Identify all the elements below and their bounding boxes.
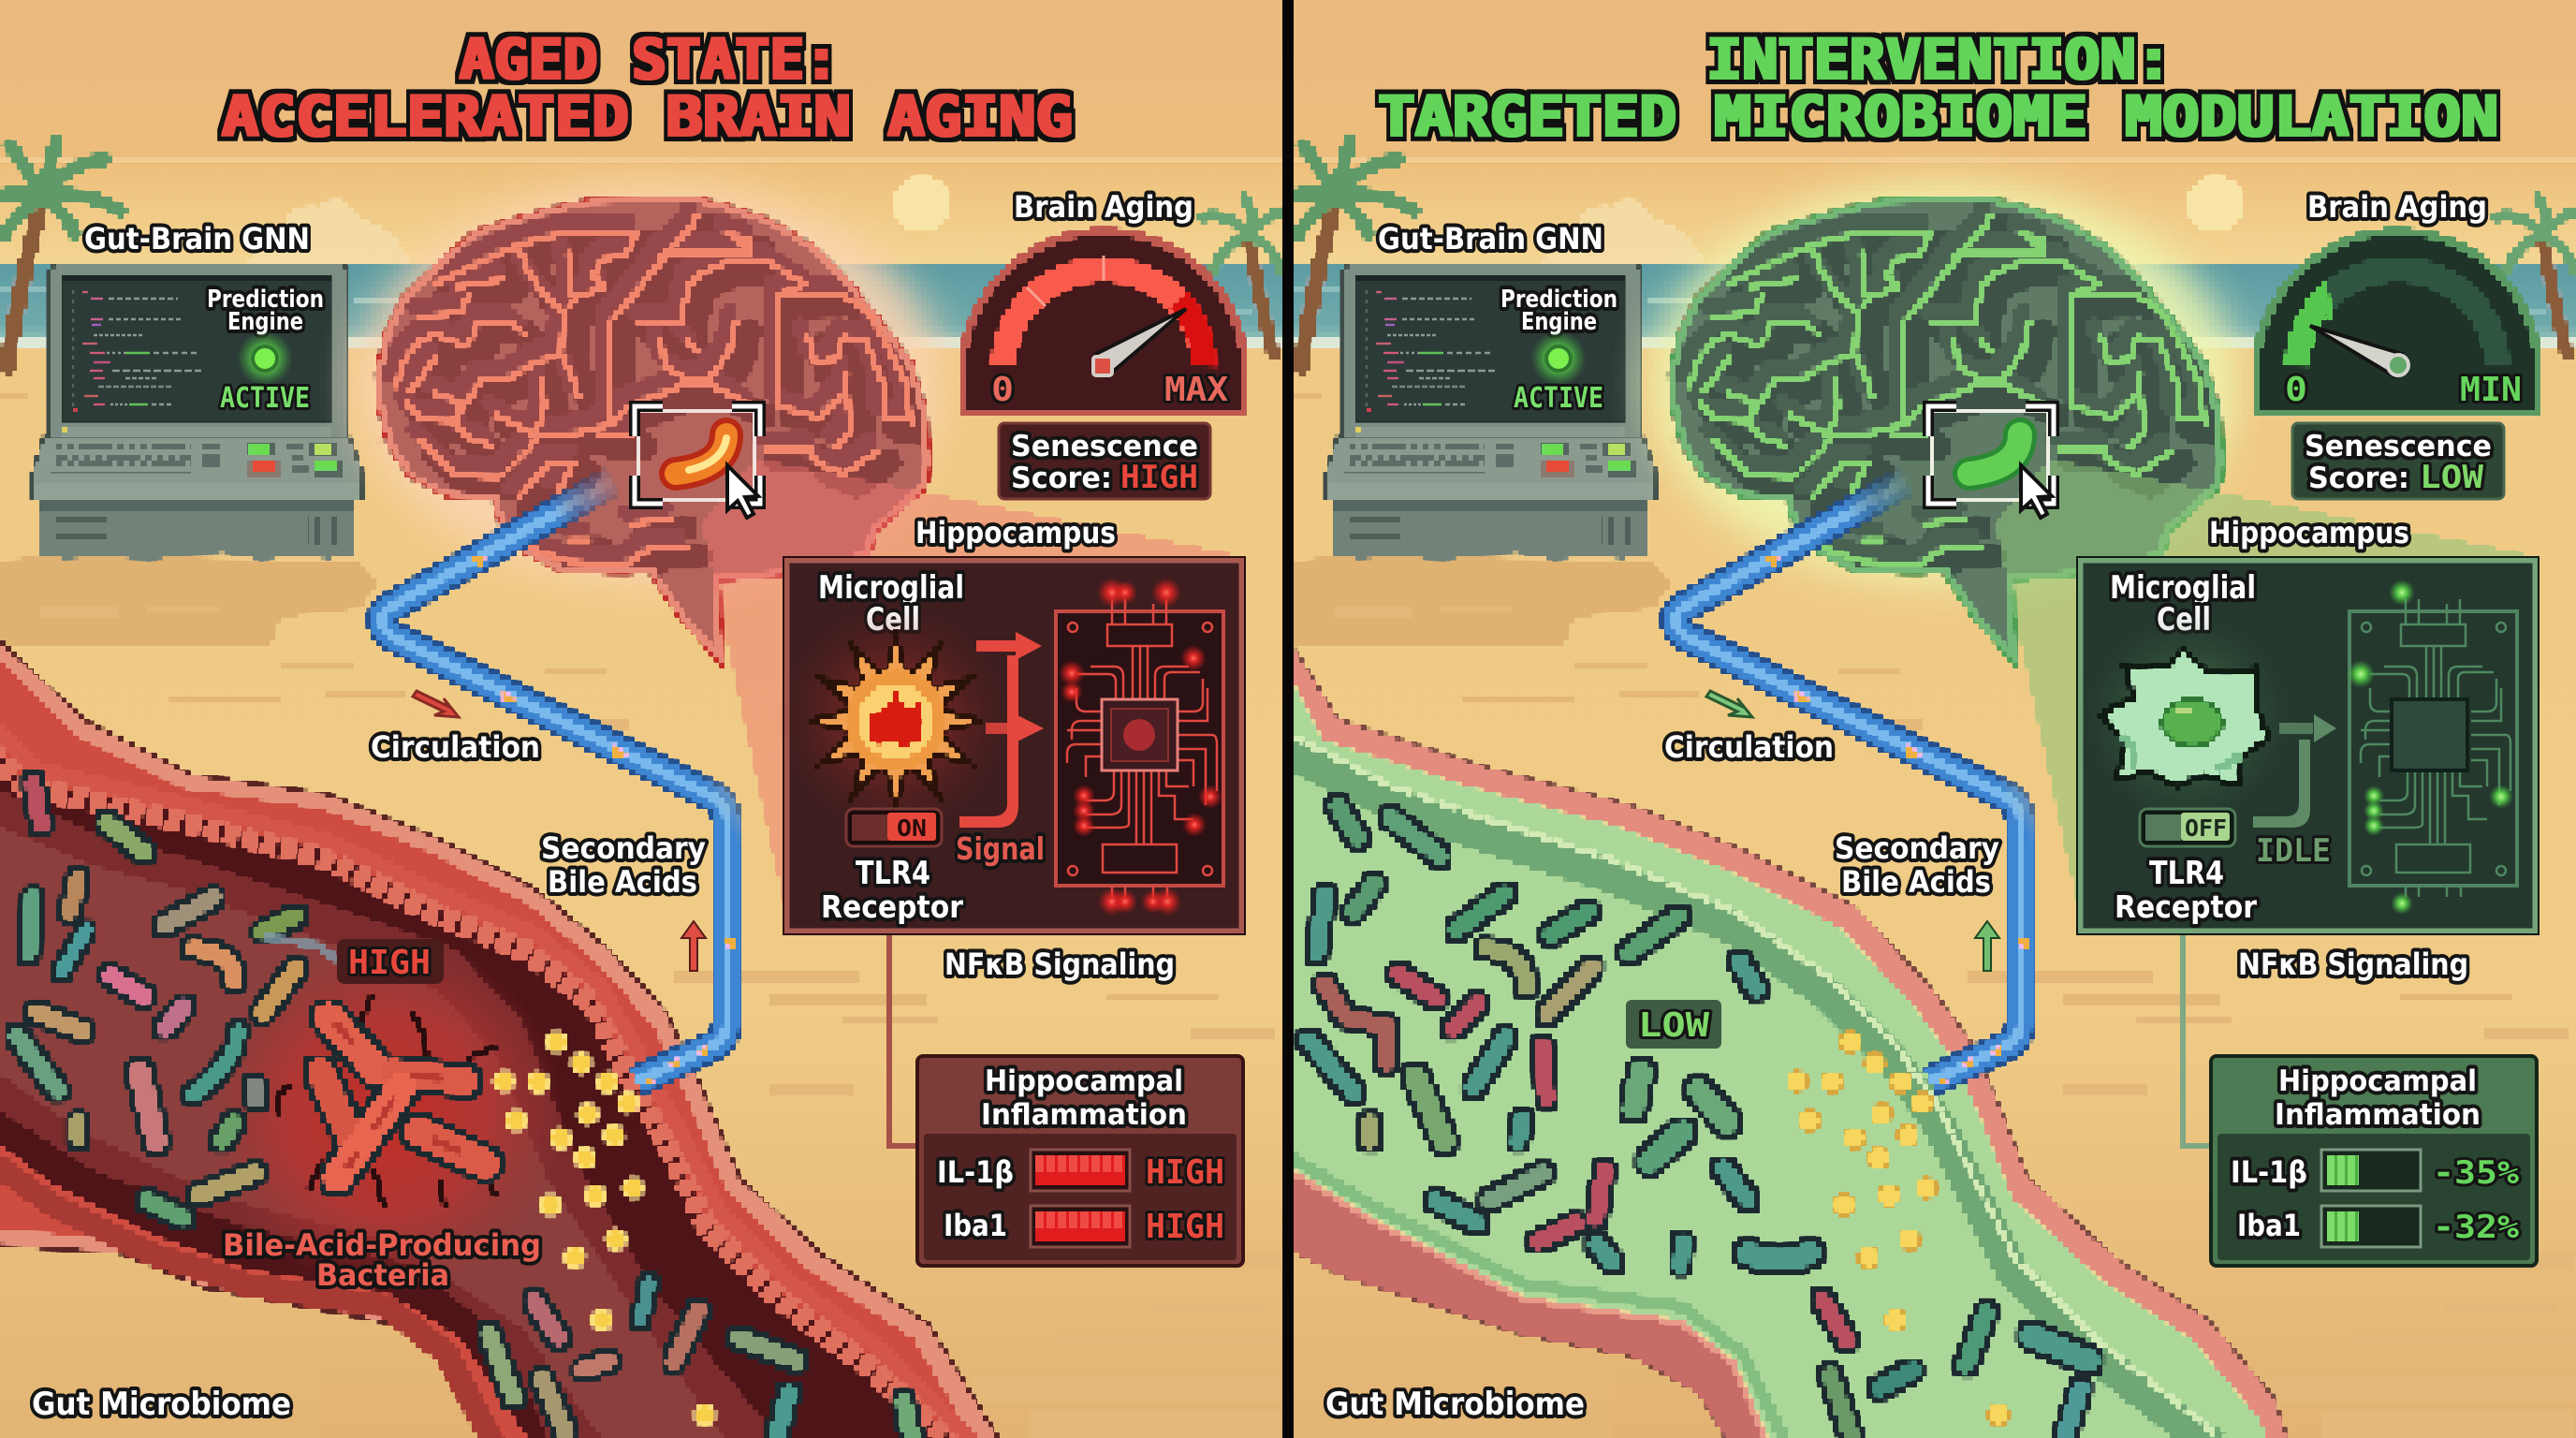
badge: low load (1626, 1000, 1721, 1049)
title: intervention (1378, 27, 2498, 150)
panel: hippocampal inflammation: Hippocampal (2278, 1064, 2477, 1098)
senescence score box: LOW (2420, 459, 2484, 496)
gauge: brain aging min: Brain Aging (2307, 189, 2487, 225)
panel: intervention state (1284, 0, 2576, 1438)
senescence score box (999, 423, 1210, 499)
gauge: brain aging min (2258, 189, 2537, 412)
arrows: signal to chip (959, 632, 1044, 828)
icon: cursor (727, 465, 758, 518)
label: secondary bile acids with arrow: Bile Acids (548, 864, 697, 900)
toggle: TLR4 on: ON (897, 814, 927, 842)
brain: calm (1652, 185, 2236, 665)
bacteria: mixed microbiome (17, 784, 912, 1438)
gauge: brain aging max (964, 189, 1243, 412)
senescence score box (2292, 423, 2504, 499)
computer: gut-brain GNN: Prediction (207, 286, 324, 314)
panel: microglial cell and circuit: Cell (866, 601, 920, 638)
panel: microglial cell and circuit: TLR4 (2149, 855, 2224, 892)
badge: high load (337, 939, 444, 984)
title: aged state: AGED STATE: (460, 27, 839, 93)
pipe: circulation (1676, 481, 2032, 1086)
panel: microglial cell and circuit: Signal (956, 830, 1045, 867)
title: aged state (222, 27, 1073, 150)
panel: hippocampal inflammation (2211, 1056, 2537, 1266)
label: bile-acid-producing bacteria (223, 1227, 541, 1293)
beam: brain to hippocampus (1996, 459, 2539, 917)
title: intervention: TARGETED MICROBIOME MODULATION (1378, 84, 2498, 150)
gut wall: healthy (1284, 633, 2291, 1438)
label: gut microbiome: Gut Microbiome (32, 1386, 291, 1423)
panel: hippocampal inflammation: -32% (2433, 1209, 2520, 1246)
label: hippocampus: Hippocampus (2209, 515, 2409, 550)
label: circulation with arrow: Circulation (1664, 729, 1834, 765)
toggle: TLR4 off (2140, 809, 2235, 846)
label: bile-acid-producing bacteria: Bacteria (316, 1257, 449, 1293)
computer: gut-brain GNN: Gut-Brain GNN (84, 221, 310, 257)
panel: microglial cell and circuit: Receptor (2115, 888, 2258, 925)
label: circulation with arrow: Circulation (371, 729, 540, 765)
icon: activated microglia (777, 602, 1011, 836)
panel: hippocampal inflammation: Inflammation (981, 1098, 1187, 1132)
title: aged state: ACCELERATED BRAIN AGING (222, 84, 1073, 150)
bacteria: balanced microbiome (1309, 806, 2089, 1438)
secondary bile acid dots (493, 1032, 715, 1425)
badge: low load: LOW (1638, 1006, 1709, 1045)
gauge: brain aging min: MIN (2460, 371, 2522, 409)
target box with bacterium (635, 406, 760, 518)
panel: hippocampal inflammation: Inflammation (2275, 1098, 2481, 1132)
panel: hippocampal inflammation: HIGH (1146, 1208, 1224, 1246)
title: intervention: INTERVENTION: (1706, 27, 2172, 93)
pipe: circulation (382, 481, 739, 1086)
badge: high load: HIGH (348, 944, 431, 982)
label: secondary bile acids with arrow: Secondary (1835, 830, 1999, 866)
label: hippocampus: Hippocampus (915, 515, 1116, 550)
computer: gut-brain GNN: Engine (1521, 308, 1597, 336)
label: secondary bile acids with arrow: Bile Acids (1841, 864, 1991, 900)
secondary bile acid dots (1787, 1032, 2009, 1425)
bile-acid-producing bacteria cluster (278, 992, 496, 1208)
label: bile-acid-producing bacteria: Bile-Acid-Producing (223, 1227, 541, 1263)
computer: gut-brain GNN: Engine (227, 308, 303, 336)
beach background (0, 0, 1301, 1438)
beam: brain to hippocampus (702, 459, 1245, 917)
label: secondary bile acids with arrow (1835, 830, 1999, 971)
gauge: brain aging min: 0 (2285, 371, 2307, 409)
panel: microglial cell and circuit: IDLE (2256, 832, 2331, 870)
divider (1282, 0, 1294, 1438)
senescence score box: Score: (2308, 462, 2409, 495)
gauge: brain aging max: Brain Aging (1014, 189, 1193, 225)
computer: gut-brain GNN (33, 221, 362, 560)
gut wall: inflamed (0, 632, 998, 1438)
toggle: TLR4 on (846, 809, 942, 846)
senescence score box: Senescence (2305, 430, 2492, 463)
panel: hippocampal inflammation: Hippocampal (985, 1064, 1183, 1098)
target box with bacterium (1928, 406, 2054, 518)
connector: NF-kB line (889, 934, 917, 1146)
panel: microglial cell and circuit: Microglial (2110, 569, 2256, 607)
panel: hippocampal inflammation: IL-1β (2231, 1154, 2307, 1190)
panel: aged state (0, 0, 1301, 1438)
panel: hippocampal inflammation: Iba1 (944, 1208, 1007, 1243)
panel: hippocampal inflammation: -35% (2433, 1154, 2520, 1192)
icon: resting microglia (2071, 602, 2305, 836)
beach background (1284, 0, 2576, 1438)
panel: hippocampal inflammation: IL-1β (937, 1154, 1014, 1190)
chip: circuit idle (2347, 580, 2517, 915)
label: circulation with arrow (1664, 691, 1834, 765)
computer: gut-brain GNN: ACTIVE (220, 382, 310, 415)
computer: gut-brain GNN: Prediction (1500, 286, 1617, 314)
icon: cursor (2021, 465, 2052, 518)
senescence score box: Senescence (1011, 430, 1198, 463)
senescence score box: Score: (1011, 462, 1112, 495)
arrows: idle signal (2253, 714, 2336, 828)
panel: hippocampal inflammation: Iba1 (2237, 1208, 2301, 1243)
computer: gut-brain GNN: ACTIVE (1514, 382, 1603, 415)
label: secondary bile acids with arrow: Secondary (541, 830, 706, 866)
label: NF-kB signaling: NFκB Signaling (2238, 946, 2468, 982)
toggle: TLR4 off: OFF (2185, 814, 2227, 842)
panel: microglial cell and circuit: Microglial (818, 569, 964, 607)
panel: microglial cell and circuit: TLR4 (856, 855, 930, 892)
connector: NF-kB line (2183, 934, 2211, 1146)
panel: hippocampal inflammation (917, 1056, 1243, 1266)
panel: microglial cell and circuit (777, 557, 1245, 934)
label: circulation with arrow (371, 691, 540, 765)
label: NF-kB signaling: NFκB Signaling (944, 946, 1175, 982)
gauge: brain aging max: MAX (1164, 371, 1228, 409)
panel: microglial cell and circuit: Cell (2157, 601, 2211, 638)
panel: hippocampal inflammation: HIGH (1146, 1153, 1224, 1192)
panel: microglial cell and circuit: Receptor (821, 888, 964, 925)
computer: gut-brain GNN (1326, 221, 1656, 560)
label: secondary bile acids with arrow (541, 830, 706, 971)
gauge: brain aging max: 0 (991, 371, 1014, 409)
senescence score box: HIGH (1120, 459, 1198, 496)
chip: circuit active (1056, 578, 1223, 916)
computer: gut-brain GNN: Gut-Brain GNN (1378, 221, 1603, 257)
label: gut microbiome: Gut Microbiome (1325, 1386, 1585, 1423)
brain: inflamed (359, 185, 943, 665)
panel: microglial cell and circuit (2071, 557, 2539, 934)
